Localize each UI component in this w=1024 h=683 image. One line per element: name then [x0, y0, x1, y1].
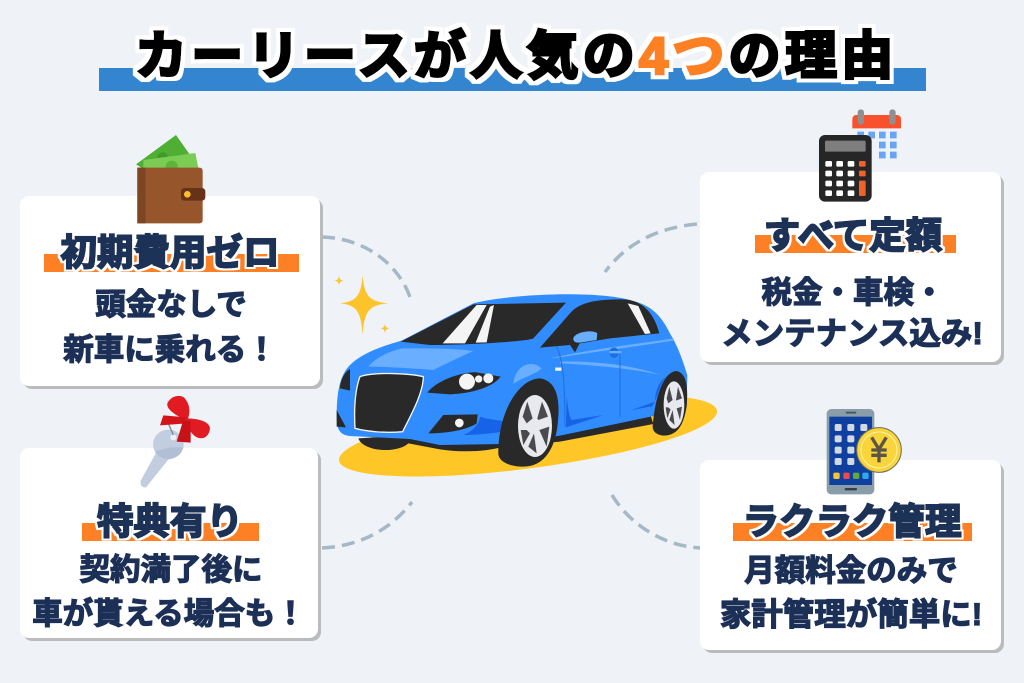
sparkles: [334, 275, 390, 335]
body text: メンテナンス込み!: [721, 315, 983, 351]
body text: 税金・車検・: [762, 276, 944, 310]
icon: wallet with banknotes: [136, 135, 205, 223]
heading: すべて定額: [764, 215, 942, 256]
yen coin: [857, 428, 901, 472]
body text: 家計管理が簡単に!: [720, 596, 982, 632]
calendar: [852, 109, 901, 158]
grille: [355, 374, 423, 432]
underbody: [358, 413, 653, 451]
mirror: [570, 343, 580, 352]
fog light: [428, 414, 478, 433]
yellow ground ellipse: [335, 378, 721, 493]
sparkles and car illustration: [334, 275, 721, 493]
body text: 月額料金のみで: [744, 554, 958, 588]
rear wheel: [653, 371, 687, 436]
connector: bottom right: [612, 495, 702, 548]
side windows: [540, 299, 659, 348]
connector: bottom left: [322, 502, 412, 548]
front wheel: [498, 378, 559, 467]
title: カーリースが人気の4つの理由: [135, 28, 898, 86]
connector: top right: [605, 224, 697, 272]
body text: 新車に乗れる！: [63, 333, 277, 367]
panel: 初期費用ゼロ: [20, 196, 323, 389]
windshield: [401, 303, 566, 345]
heading: 特典有り: [97, 501, 243, 542]
car body: [337, 294, 687, 445]
body text: 頭金なしで: [95, 288, 247, 322]
heading: 初期費用ゼロ: [60, 232, 280, 273]
heading: ラクラク管理: [742, 501, 962, 542]
panel: ラクラク管理: [700, 460, 1004, 653]
title banner: [99, 28, 926, 91]
body text: 車が貰える場合も！: [32, 596, 306, 631]
icon: key with red ribbon: [141, 396, 210, 487]
icon: smartphone with yen coin: [827, 409, 901, 494]
headlight: [427, 372, 501, 394]
panel: すべて定額: [700, 172, 1004, 365]
calculator: [819, 135, 872, 202]
body highlights: [368, 348, 473, 370]
icon: calendar and calculator: [819, 109, 901, 202]
connector: top left: [322, 237, 411, 300]
panel: 特典有り: [20, 448, 321, 641]
body text: 契約満了後に: [80, 553, 262, 587]
